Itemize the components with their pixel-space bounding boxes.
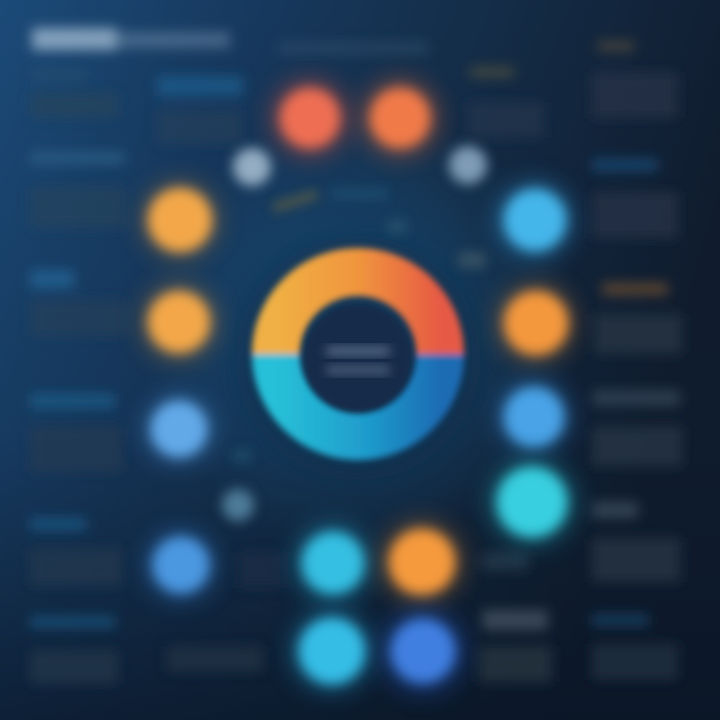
donut chart [276, 272, 440, 436]
node: orange left upper [140, 180, 220, 260]
small labels around ring [232, 190, 486, 462]
node: pale small right [449, 146, 487, 184]
node: coral top right [360, 78, 440, 158]
node: orange left lower [139, 282, 219, 362]
node: pale small left [233, 148, 271, 186]
node: turquoise right [488, 458, 576, 546]
donut lower arc [276, 354, 440, 436]
right column text blocks [468, 41, 682, 682]
node: cyan bottom [293, 523, 373, 603]
node: blue right [496, 379, 572, 455]
title [32, 28, 428, 54]
node: pale small lower left [222, 489, 254, 521]
node: blue lower left [145, 529, 217, 601]
node: royal blue bottom [381, 609, 465, 693]
second column text blocks [157, 76, 284, 672]
donut centre [304, 304, 412, 412]
node: orange bottom [380, 520, 464, 604]
central glow [140, 110, 580, 550]
node: coral top left [270, 78, 350, 158]
node: sky right top [495, 180, 575, 260]
node: orange right [496, 283, 576, 363]
node: cyan bottom lower [290, 609, 374, 693]
node: blue left [143, 393, 215, 465]
donut halo [236, 236, 480, 480]
donut upper arc [276, 272, 440, 354]
left column text blocks [30, 70, 126, 684]
